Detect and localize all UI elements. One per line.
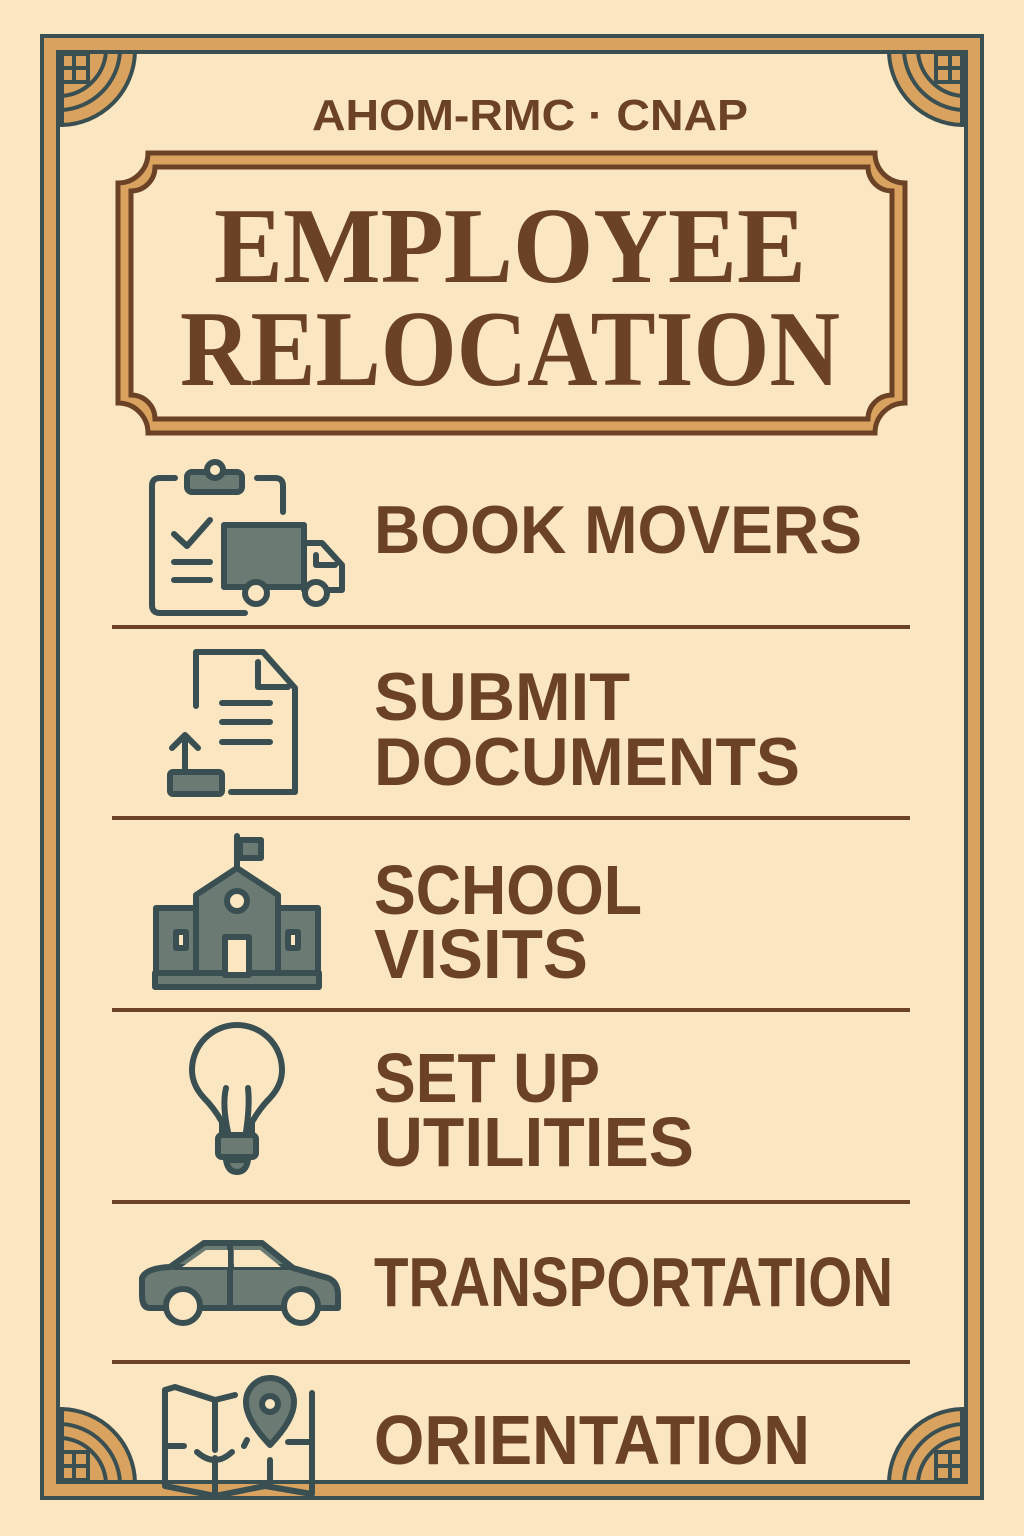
text: VISITS bbox=[374, 915, 588, 993]
label: school visits: SCHOOL bbox=[374, 851, 642, 929]
icon: map with pin bbox=[165, 1378, 312, 1496]
title box: RELOCATION bbox=[180, 290, 840, 409]
icon: school bbox=[155, 836, 319, 987]
icon: clipboard and truck bbox=[152, 462, 342, 613]
title box bbox=[118, 153, 905, 433]
label: orientation: ORIENTATION bbox=[374, 1401, 810, 1479]
text: UTILITIES bbox=[374, 1103, 694, 1181]
label: set up utilities: SET UP bbox=[374, 1039, 600, 1117]
icon: document upload bbox=[170, 652, 295, 794]
icon: light bulb bbox=[192, 1025, 282, 1172]
text: DOCUMENTS bbox=[374, 724, 800, 800]
title text: EMPLOYEE bbox=[214, 187, 806, 306]
label: book movers: BOOK MOVERS bbox=[374, 492, 862, 568]
label: submit documents: SUBMIT bbox=[374, 659, 630, 735]
icon: car bbox=[142, 1243, 338, 1323]
header: AHOM-RMC · CNAP bbox=[312, 91, 748, 140]
label: transportation: TRANSPORTATION bbox=[374, 1243, 893, 1321]
